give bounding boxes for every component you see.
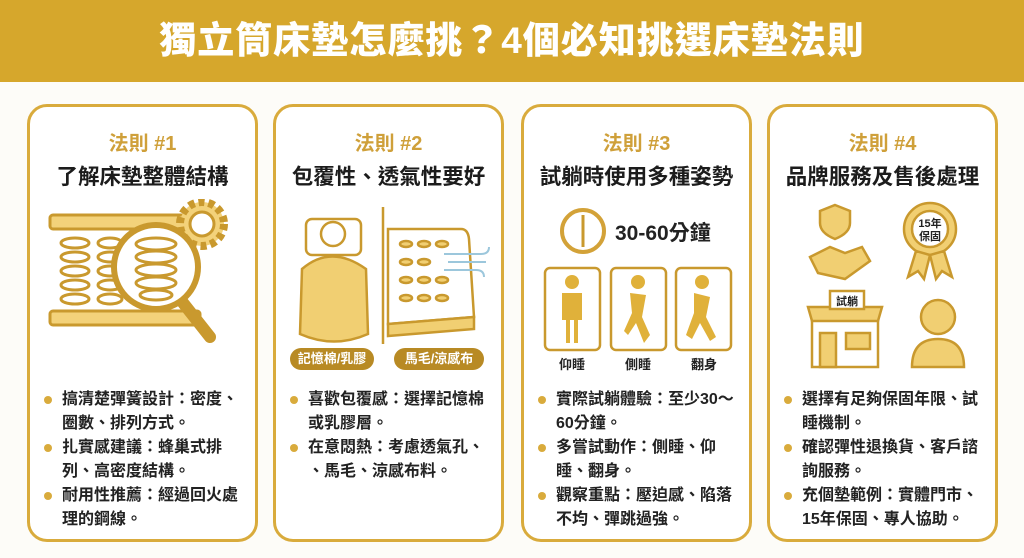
tag: memory foam <box>290 348 374 370</box>
rule 1 bullets: 耐用性推薦：經過回火處 <box>62 487 238 504</box>
rule 2 bullets: 在意悶熱：考慮透氣孔、 <box>308 439 484 456</box>
icon: sleeping positions <box>544 266 732 372</box>
rule 4 bullets <box>784 390 978 528</box>
icon: sleeping positions: 側睡 <box>625 357 651 372</box>
rule 2 bullets: 喜歡包覆感：選擇記憶棉 <box>308 391 484 408</box>
rule 4 bullets: 15年保固、專人協助。 <box>802 510 964 528</box>
rule 2 bullets: 、馬毛、涼感布料。 <box>308 462 452 480</box>
rule 4 bullets: 詢服務。 <box>802 462 866 480</box>
icon: clock with duration: 30-60分鐘 <box>615 222 711 245</box>
rule 4 bullets: 睡機制。 <box>802 414 866 432</box>
tag: horsehair <box>394 348 484 370</box>
rule 4 label: 法則 #4 <box>849 133 916 155</box>
panel: rule 3 <box>521 104 752 542</box>
icon: clock with duration <box>560 208 711 254</box>
rule 3 bullets: 觀察重點：壓迫感、陷落 <box>556 487 732 504</box>
icon: service icons: 試躺 <box>836 294 858 308</box>
icon: service icons: 保固 <box>919 230 941 243</box>
icon: service icons <box>806 202 966 368</box>
rule 3 bullets: 睡、翻身。 <box>556 462 636 480</box>
rule 1 bullets: 列、高密度結構。 <box>62 462 190 480</box>
rule 3 bullets: 多嘗試動作：側睡、仰 <box>556 439 716 456</box>
icon: sleeping positions: 仰睡 <box>559 357 585 372</box>
rule 3 heading: 試躺時使用多種姿勢 <box>540 165 733 189</box>
header banner <box>0 0 1024 82</box>
rule 3 bullets <box>538 390 734 528</box>
panel: rule 2 <box>273 104 504 542</box>
icon: service icons: 15年 <box>918 216 942 230</box>
rule 1 label: 法則 #1 <box>109 133 176 155</box>
icon: sleeping positions: 翻身 <box>691 357 717 372</box>
rule 1 bullets: 搞清楚彈簧設計：密度、 <box>62 391 238 408</box>
panel: rule 1 <box>27 104 258 542</box>
rule 1 bullets: 理的鋼線。 <box>62 510 142 528</box>
rule 3 bullets: 不均、彈跳過強。 <box>556 510 684 528</box>
icon: springs with magnifier <box>48 199 228 343</box>
rule 3 label: 法則 #3 <box>603 133 670 155</box>
panel: rule 4 <box>767 104 998 542</box>
rule 1 bullets <box>44 390 238 528</box>
rule 4 bullets: 確認彈性退換貨、客戶諮 <box>802 439 978 456</box>
rule 3 bullets: 實際試躺體驗：至少30～ <box>556 391 734 408</box>
header banner: 獨立筒床墊怎麼挑？4個必知挑選床墊法則 <box>159 20 865 61</box>
tag: horsehair: 馬毛/涼感布 <box>405 351 473 366</box>
rule 1 bullets: 扎實感建議：蜂巢式排 <box>62 439 222 456</box>
rule 1 bullets: 圈數、排列方式。 <box>62 414 190 432</box>
rule 3 bullets: 60分鐘。 <box>556 414 622 432</box>
rule 2 bullets <box>290 390 484 480</box>
tag: memory foam: 記憶棉/乳膠 <box>298 351 366 366</box>
rule 2 heading: 包覆性、透氣性要好 <box>292 165 485 189</box>
rule 4 bullets: 充個墊範例：實體門市、 <box>802 487 978 504</box>
icon: wrapped sleeper and breathable mattress <box>298 207 490 344</box>
rule 2 bullets: 或乳膠層。 <box>308 414 388 432</box>
rule 2 label: 法則 #2 <box>355 133 422 155</box>
rule 1 heading: 了解床墊整體結構 <box>56 165 228 189</box>
rule 4 bullets: 選擇有足夠保固年限、試 <box>802 391 978 408</box>
rule 4 heading: 品牌服務及售後處理 <box>786 165 979 189</box>
